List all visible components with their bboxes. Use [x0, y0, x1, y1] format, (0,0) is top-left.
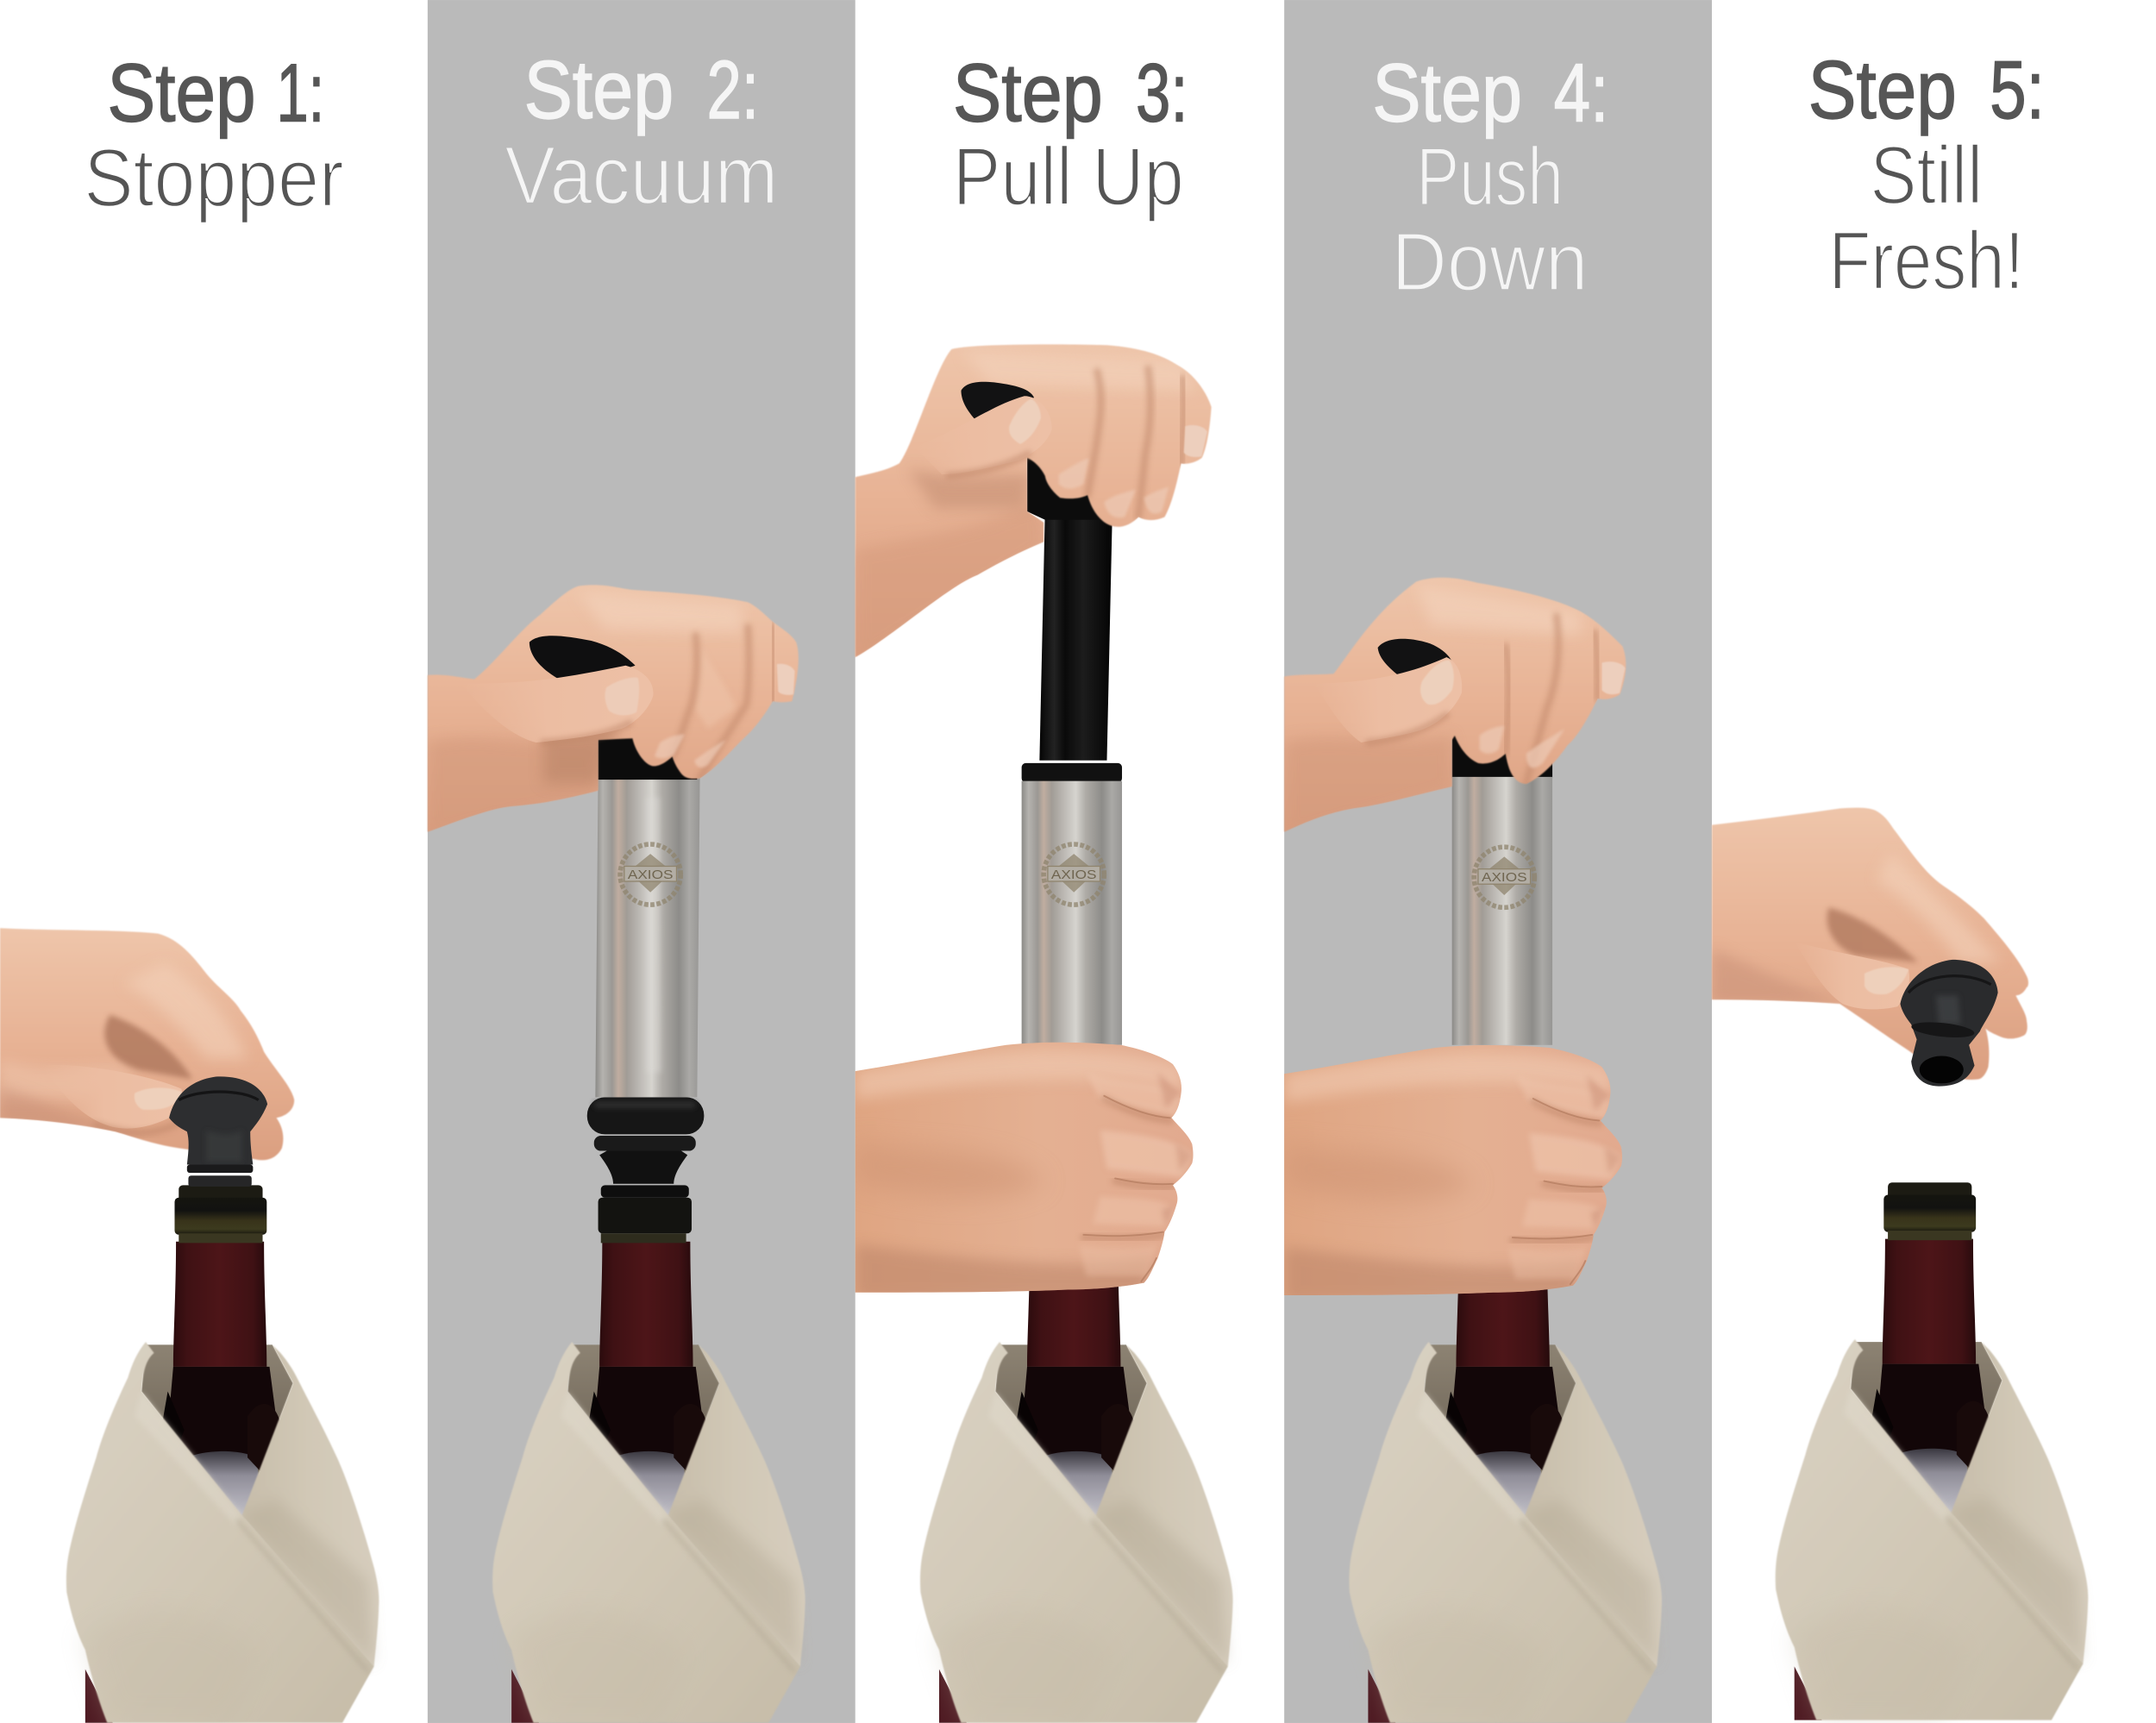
heading: step 1: Stopper: [84, 132, 344, 224]
black handle: [1378, 639, 1453, 683]
heading: step 4: Down: [1392, 216, 1589, 308]
thumb: [1795, 942, 1909, 1009]
heading: step 2: [505, 44, 778, 222]
panel: step 2 vacuum: [428, 44, 805, 1723]
black pump base on bottle lip: [587, 1097, 704, 1243]
heading: step 5: 5:: [1990, 44, 2045, 136]
wrapped wine bottle: [66, 1185, 379, 1723]
heading: step 2: Vacuum: [505, 129, 778, 222]
thumbnail: [605, 678, 639, 716]
thumbnail: [1865, 967, 1908, 994]
panel: step 4 push down: [1284, 47, 1662, 1723]
steel pump tube: [1452, 715, 1552, 1045]
heading: step 4: [1372, 47, 1608, 308]
pump cap: [599, 736, 697, 780]
lower hand holding bottle: [1284, 1045, 1622, 1302]
hand placing stopper: [0, 928, 294, 1160]
wrapped wine bottle: [920, 1242, 1233, 1723]
heading: step 2: Step: [523, 44, 674, 136]
thumb: [914, 396, 1052, 474]
wrapped wine bottle: [1349, 1242, 1662, 1723]
heading: step 1: Step: [107, 47, 256, 139]
wrapped wine bottle: [492, 1242, 805, 1723]
thumb: [1313, 657, 1462, 742]
heading: step 3: 3:: [1136, 47, 1188, 139]
heading: step 5: [1808, 44, 2045, 307]
removed stopper: [1900, 960, 1998, 1087]
logo: [620, 844, 680, 905]
upper hand pulling: [856, 344, 1212, 667]
logo: [1044, 844, 1104, 905]
hand holding removed stopper: [1712, 808, 2028, 1080]
heading: step 5: Still: [1870, 129, 1983, 222]
logo: [1474, 847, 1534, 907]
heading: step 5: Fresh!: [1829, 215, 2024, 307]
wrapped wine bottle: [1776, 1182, 2088, 1720]
heading: step 3: Step: [953, 47, 1103, 139]
stopper: [169, 1076, 267, 1187]
steel pump tube: [595, 778, 700, 1097]
heading: step 2: 2:: [707, 44, 759, 136]
heading: step 4: Step: [1372, 47, 1522, 139]
extended black plunger rod: [1027, 447, 1117, 761]
thumb: [461, 666, 654, 742]
heading: step 1: [84, 47, 344, 224]
steel pump tube: [1022, 763, 1122, 1045]
heading: step 1: 1:: [276, 47, 324, 139]
black handle: [961, 382, 1034, 429]
thumbnail: [1420, 660, 1454, 705]
heading: step 5: Step: [1808, 44, 1957, 136]
lower hand holding bottle: [856, 1043, 1194, 1300]
heading: step 4: Push: [1416, 131, 1564, 223]
hand pressing pump: [428, 585, 799, 839]
heading: step 3: [953, 47, 1188, 223]
upper hand pushing: [1284, 578, 1626, 839]
panel: step 3 pull up: [856, 47, 1233, 1723]
thumbnail: [1009, 398, 1041, 444]
black handle: [530, 636, 636, 682]
heading: step 4: 4:: [1554, 47, 1608, 139]
panel: step 5 still fresh: [1712, 44, 2088, 1720]
heading: step 3: Pull Up: [953, 131, 1184, 223]
panel: step 1 stopper: [0, 47, 379, 1723]
